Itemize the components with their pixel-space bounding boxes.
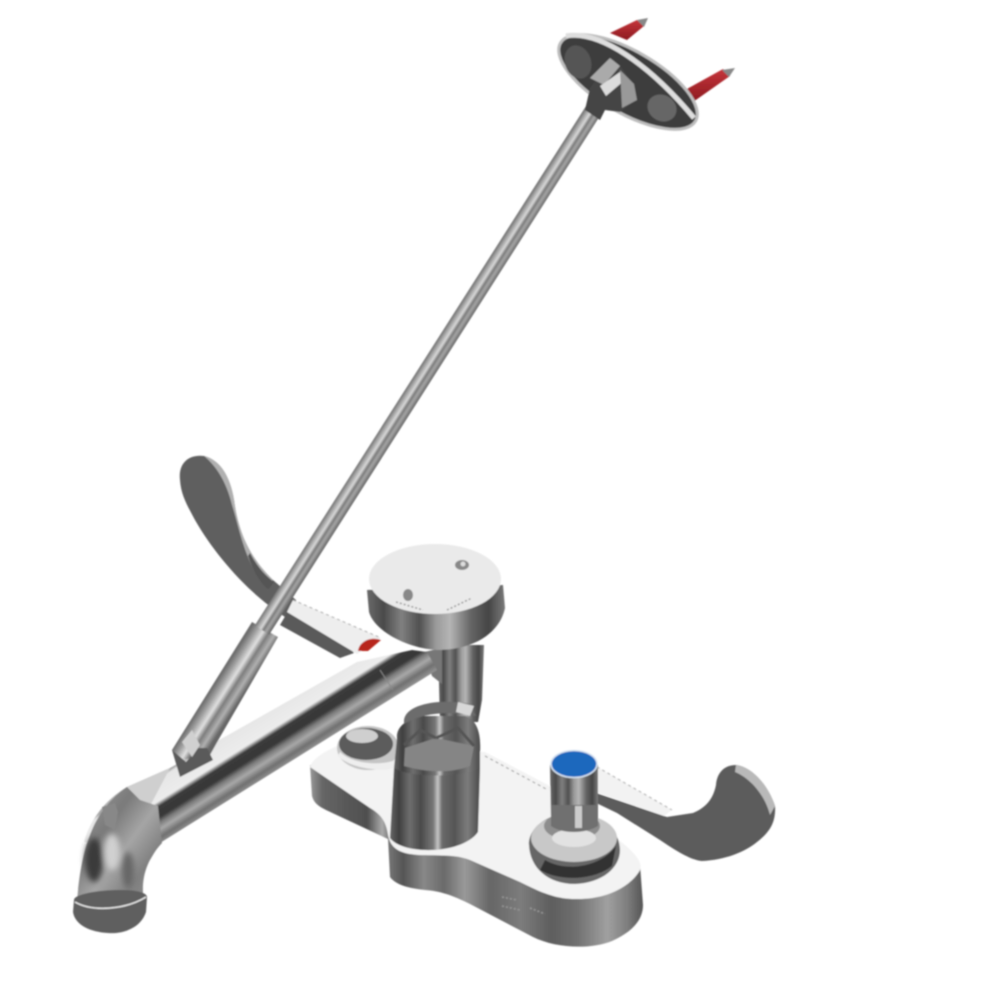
handle arm underside bbox=[280, 613, 354, 658]
neck bbox=[438, 645, 484, 722]
center swivel bracket bbox=[585, 58, 636, 120]
spout tube bbox=[84, 650, 437, 860]
handle arm top bbox=[287, 600, 381, 654]
spout bbox=[73, 650, 437, 933]
central valve body bbox=[367, 544, 505, 850]
hot indicator: red bbox=[358, 639, 381, 651]
mounting holes bbox=[560, 42, 596, 82]
upper red pin bbox=[610, 18, 648, 40]
spout to neck joint bbox=[424, 648, 442, 684]
cap screw bbox=[455, 560, 469, 570]
lower red pin bbox=[685, 68, 735, 102]
plate disc bbox=[545, 16, 711, 148]
elbow bbox=[77, 787, 162, 902]
elbow reflections bbox=[85, 834, 134, 888]
cap top bbox=[369, 544, 501, 614]
deck plate base bbox=[310, 745, 643, 947]
plate top surface bbox=[310, 745, 641, 899]
knurled nut bbox=[394, 716, 480, 776]
right valve nut bbox=[529, 805, 620, 884]
wall mount plate bbox=[545, 16, 735, 148]
spout joint line bbox=[380, 670, 393, 690]
rear valve nut bbox=[337, 726, 399, 770]
right wrist-blade handle bbox=[550, 750, 775, 861]
ring collar bbox=[404, 702, 476, 724]
hex nut faces bbox=[404, 738, 474, 771]
lower body bbox=[390, 768, 480, 850]
cold indicator: blue cap bbox=[551, 750, 597, 778]
support rod lower sleeve bbox=[172, 622, 278, 777]
embossed marking on plate bbox=[502, 897, 545, 914]
aerator nozzle bbox=[73, 890, 147, 933]
handle stem bbox=[550, 765, 598, 822]
spout tab bbox=[102, 803, 118, 830]
stem slot over nut bbox=[551, 805, 598, 832]
left side of plate bbox=[310, 765, 392, 840]
front side of plate bbox=[388, 838, 643, 947]
plate rim highlight bbox=[566, 35, 694, 118]
support rod bbox=[262, 100, 600, 630]
cap marks bbox=[396, 589, 472, 610]
rod clamp bracket bbox=[172, 748, 213, 777]
knurled cap side bbox=[367, 585, 505, 650]
back wrist-blade handle bbox=[180, 456, 381, 658]
